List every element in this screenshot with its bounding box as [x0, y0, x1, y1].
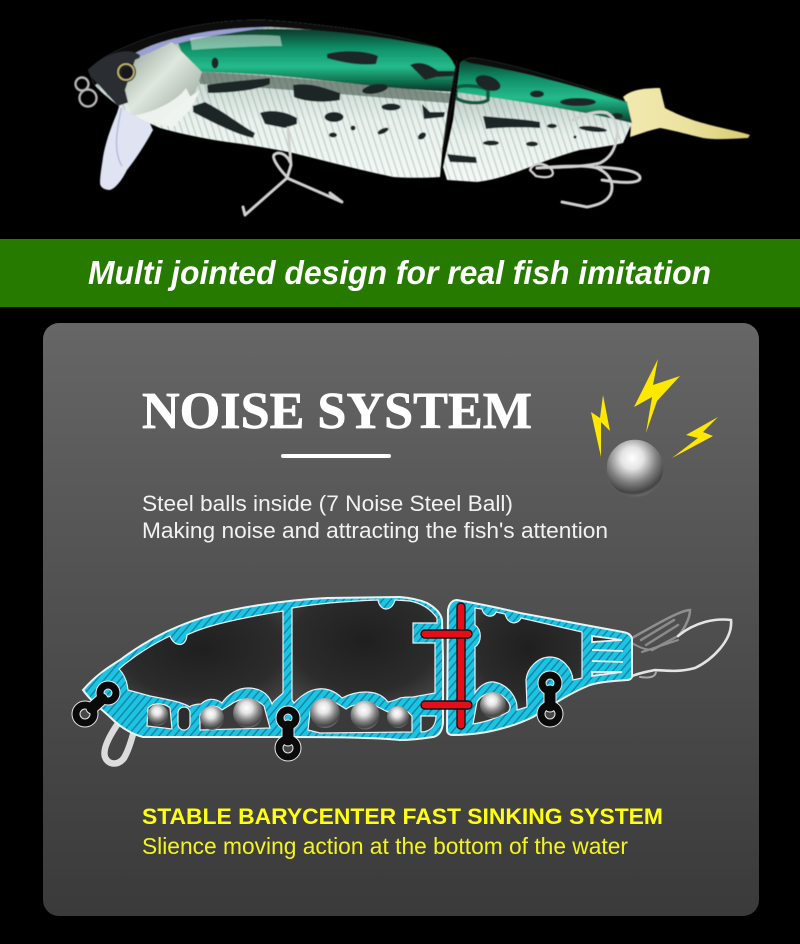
barycenter heading: STABLE BARYCENTER FAST SINKING SYSTEM — [142, 804, 663, 829]
barycenter description: Slience moving action at the bottom of the water — [142, 833, 628, 859]
rear treble hook — [530, 112, 640, 207]
heading underline — [281, 454, 391, 458]
lure photo — [76, 15, 750, 215]
description text — [142, 491, 608, 543]
rear cavity — [475, 608, 582, 710]
hook eyelets — [76, 675, 559, 757]
lip — [100, 87, 153, 190]
steel balls — [148, 692, 506, 730]
panel heading: NOISE SYSTEM — [142, 383, 532, 440]
noise system panel — [43, 323, 759, 916]
nose rings — [76, 78, 96, 106]
rear spots — [447, 72, 623, 163]
lure tail — [623, 88, 750, 139]
lure cross-section diagram — [76, 597, 731, 764]
red axle pins — [421, 603, 472, 729]
icon: steel ball with lightning — [591, 359, 718, 497]
ball pockets — [147, 693, 510, 733]
green banner — [0, 239, 800, 307]
lure head cover — [125, 42, 202, 122]
rear body segment — [440, 55, 640, 185]
diagram tail fins — [632, 610, 731, 677]
front body segment — [80, 15, 460, 185]
description text: Steel balls inside (7 Noise Steel Ball) — [142, 491, 513, 516]
front cavities — [119, 600, 437, 707]
eye — [116, 62, 136, 82]
front shell — [83, 597, 443, 740]
lure spots — [193, 51, 456, 141]
tail slits — [592, 636, 623, 676]
front treble hook — [243, 128, 342, 215]
body joint — [443, 60, 457, 150]
diagram lip — [104, 692, 142, 764]
description text: Making noise and attracting the fish's attention — [142, 518, 608, 543]
banner title: Multi jointed design for real fish imitation — [88, 254, 711, 291]
rear shell — [447, 600, 632, 735]
